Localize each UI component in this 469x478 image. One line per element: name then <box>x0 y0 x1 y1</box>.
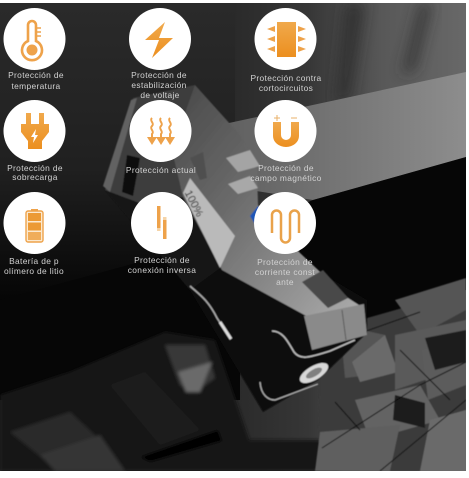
rubble: left <box>0 332 340 471</box>
label: temperature: Protección de <box>8 70 64 80</box>
label: reverse connection: conexión inversa <box>128 265 196 275</box>
icon: temperature protection <box>4 8 66 70</box>
icon: short circuit protection <box>254 8 316 70</box>
device black body <box>105 190 367 412</box>
label: constant current: Protección de <box>257 257 313 267</box>
device top face <box>172 85 362 318</box>
label: voltage stabilization: estabilización <box>131 80 187 90</box>
rubble: right <box>315 278 466 471</box>
label: current: Protección actual <box>126 165 196 175</box>
label: short circuit: cortocircuitos <box>259 83 313 93</box>
icon: magnetic field protection <box>254 100 316 162</box>
label: voltage stabilization: Protección de <box>131 70 187 80</box>
device end cap <box>302 270 348 308</box>
label: temperature: temperatura <box>11 81 61 91</box>
icon: LCD display <box>182 178 235 268</box>
icon: constant current protection <box>254 192 316 254</box>
label: constant current: ante <box>276 277 294 287</box>
icon: overload protection <box>4 100 66 162</box>
label: reverse connection: Protección de <box>134 255 190 265</box>
label: magnetic field: Protección de <box>258 163 314 173</box>
label: magnetic field: campo magnético <box>250 173 322 183</box>
label: lithium polymer battery: olímero de litio <box>4 266 64 276</box>
wall <box>215 72 466 200</box>
label: lithium polymer battery: Batería de p <box>9 256 59 266</box>
label: constant current: corriente const <box>255 267 315 277</box>
dark floor <box>156 157 466 318</box>
label: voltage stabilization: de voltaje <box>140 90 180 100</box>
icon: lithium polymer battery <box>4 192 66 254</box>
icon: voltage stabilization <box>129 8 191 70</box>
icon: LCD display: 100% <box>182 188 205 219</box>
device left panel <box>105 85 195 203</box>
icon: current protection <box>130 100 192 162</box>
device <box>103 85 367 412</box>
label: overload: Protección de <box>7 163 63 173</box>
label: overload: sobrecarga <box>12 172 58 182</box>
label: short circuit: Protección contra <box>250 73 322 83</box>
icon: reverse connection protection <box>131 192 193 254</box>
